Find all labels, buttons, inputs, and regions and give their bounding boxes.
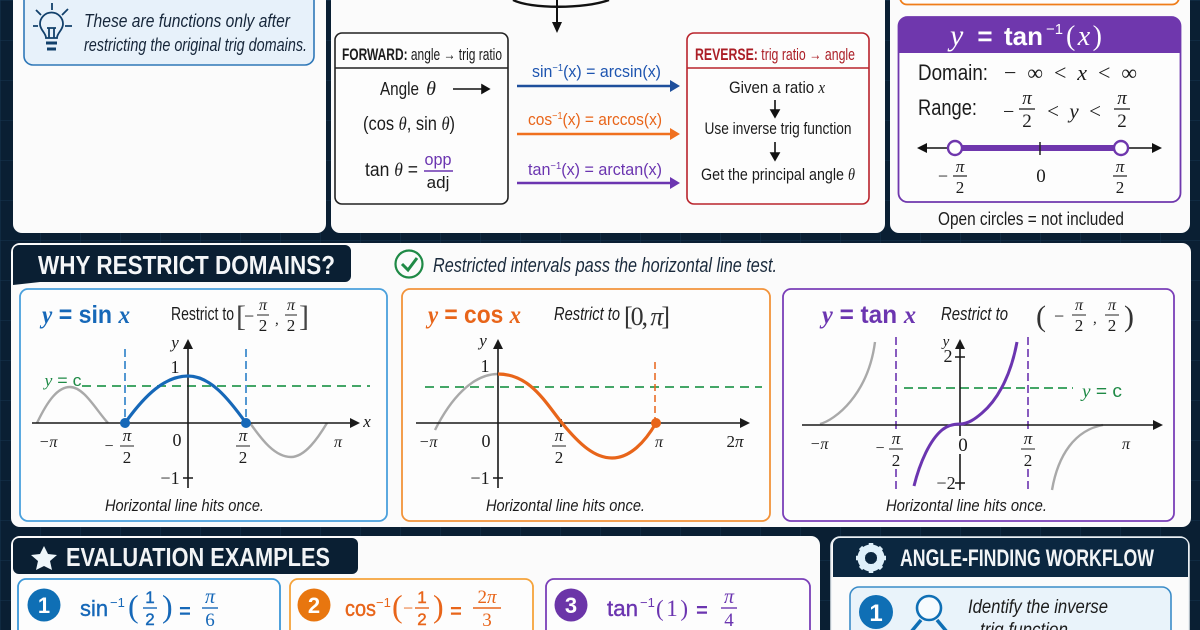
panel: evaluation examples [11,536,820,630]
title: y = tan x: y = tan x [819,301,916,329]
chart: sine graph: π [239,426,248,445]
formula: y = tan inverse x: tan [1004,21,1043,51]
range inequality: π [1022,88,1032,109]
card: tangent [783,289,1174,521]
panel: forward and reverse mapping [331,0,885,233]
range inequality: y [1067,99,1079,123]
reverse box: Get the principal angle θ [701,165,855,184]
example 2: inverse cosine: − [403,598,413,618]
formula: y = tan inverse x: −1 [1046,21,1063,38]
reverse box [687,33,869,204]
example 2: inverse cosine: 2 [417,610,427,629]
chart: tangent graph: π [892,429,901,448]
restriction: sine interval: Restrict to [171,304,234,324]
restriction: sine interval: , [275,312,279,328]
formula: y = tan inverse x [947,19,1102,52]
chart: tangent graph: −π [810,436,829,453]
restriction: sine interval: 2 [259,316,267,335]
arrow: step two to three [771,142,779,160]
icon: gear [856,543,886,573]
purple card: Domain: [918,60,988,85]
example 3: inverse tangent [546,579,810,630]
purple card: − ∞ < x < ∞ [1004,60,1137,85]
arrow: arctan mapping: (x) = arctan(x) [561,160,662,179]
chart: cosine graph: π [655,434,664,451]
chart: tangent graph: π [1122,436,1131,453]
workflow step 1 [850,587,1171,630]
forward box: FORWARD: angle → trig ratio [342,45,502,64]
restriction: sine interval [171,297,309,335]
example 3: inverse tangent: (1) [656,596,688,621]
chart: cosine graph: 2 [555,448,563,467]
restriction: tangent interval: 2 [1108,316,1116,335]
fraction: opp over adj: opp [424,150,452,169]
heading: angle-finding workflow [833,538,1188,577]
example 2: inverse cosine: cos [345,596,376,621]
callout: domain restriction note [24,0,314,65]
example 2: inverse cosine: 1 [417,588,427,607]
chart: sine graph: π [334,434,343,451]
callout text: restricting the original trig domains. [84,35,307,55]
chart: tangent graph: 2 [944,346,952,366]
workflow step 1: Identify the inverse [968,597,1108,618]
arrow: arctan mapping: −1 [550,161,562,172]
restriction: tangent interval [941,297,1134,335]
forward box: θ [426,78,436,100]
restriction: cosine interval: Restrict to [554,304,620,324]
heading: why restrict domains [13,245,351,285]
formula: y = tan inverse x: (x) [1066,21,1102,52]
forward box [335,33,508,204]
arrow: arccos mapping: cos [528,110,554,129]
number line: π [956,157,965,176]
card: sine [20,289,387,521]
icon: magnifying glass [911,596,947,630]
example 2: inverse cosine: 2 [308,593,320,618]
chart: tangent graph: π [1024,429,1033,448]
caption: Horizontal line hits once. [486,496,645,515]
example 1: inverse sine: sin [80,596,108,621]
panel: angle-finding workflow [831,537,1189,630]
chart: sine graph: 2 [239,448,247,467]
restriction: tangent interval: ( [1036,300,1046,333]
chart: tangent graph: −2 [936,473,956,493]
heading: evaluation examples: EVALUATION EXAMPLES [66,542,330,572]
example 3: inverse tangent: 3 [565,593,577,618]
example 1: inverse sine: ( [128,588,139,624]
arrow: arctan mapping: tan [528,160,552,179]
formula: y = tan inverse x: = [977,21,993,51]
number line: 2 [1116,178,1124,197]
restriction: sine interval: π [259,297,268,314]
range inequality: 2 [1117,111,1127,132]
callout text [84,11,307,55]
panel: definition note [13,0,326,233]
restriction: tangent interval: π [1108,297,1117,314]
forward box: (cos θ, sin θ) [363,114,455,135]
panel: inverse tangent card [890,0,1190,233]
example 1: inverse sine: 1 [38,593,50,618]
restriction: tangent interval: π [1075,297,1084,314]
arrow: arcsin mapping: sin [532,62,554,81]
chart: tangent graph [802,334,1163,493]
chart: tangent graph: y = c [1080,381,1122,401]
range inequality: < [1047,99,1059,123]
callout text: These are functions only after [84,11,291,31]
range inequality: π [1117,88,1127,109]
previous orange card edge [900,0,1179,4]
arrow: arcsin mapping [517,62,680,92]
chart: sine graph: − [104,438,114,455]
restriction: tangent interval: Restrict to [941,304,1008,324]
restriction: tangent interval: ) [1124,300,1134,333]
chart: sine graph: π [123,426,132,445]
title: y = cos x: y = cos x [425,301,521,329]
example 2: inverse cosine [290,579,533,630]
example 1: inverse sine: 2 [145,610,155,629]
chart: sine graph: 2 [123,448,131,467]
chart: sine graph: x [362,412,371,431]
example 1: inverse sine [18,579,280,630]
example 3: inverse tangent: −1 [640,595,655,610]
example 3: inverse tangent: tan [607,596,638,621]
forward box: Angle [380,79,419,99]
example 3: inverse tangent: = [696,600,708,622]
reverse box: Use inverse trig function [704,119,852,138]
restriction: cosine interval: [0, π] [624,302,670,331]
fraction: opp over adj [424,150,453,192]
formula: y = tan inverse x: y [947,19,964,52]
example 1: inverse sine: 1 [145,588,155,607]
chart: tangent graph: 2 [1024,451,1032,470]
card: cosine [402,289,770,521]
chart: sine graph: y = c [42,371,82,390]
example 1: inverse sine: −1 [110,595,125,610]
chart: cosine graph: 0 [482,431,490,451]
chart: cosine graph: −π [419,434,438,451]
reverse box: REVERSE: trig ratio → angle [695,45,855,64]
forward box: tan θ = [365,160,418,181]
title: y = sin x: y = sin x [39,301,130,329]
arrow: arctan mapping [517,160,680,189]
example 2: inverse cosine: ( [392,588,403,624]
fraction: opp over adj: adj [427,173,449,192]
arrow: arccos mapping: (x) = arccos(x) [563,110,662,129]
purple card: Range: [918,95,977,120]
example 1: inverse sine: = [179,601,191,623]
number line: π [1116,157,1125,176]
restriction: sine interval: [ [236,300,246,333]
arrow: arcsin mapping: −1 [552,63,563,74]
number line: 2 [956,178,964,197]
icon: star [31,546,57,570]
chart: tangent graph: − [875,440,885,457]
caption: Horizontal line hits once. [886,496,1047,515]
restriction: sine interval: 2 [287,316,295,335]
chart: sine graph: 0 [172,430,182,450]
restriction: sine interval: − [244,306,254,326]
arrow: angle to ratio [453,85,489,93]
example 2: inverse cosine: ) [433,588,444,624]
number line: − [938,166,948,186]
arrow: step one to two [771,100,779,117]
unit circle fragment with down arrow [513,0,609,33]
restriction: sine interval: π [287,297,296,314]
example 2: inverse cosine: = [450,601,462,623]
example 3: inverse tangent: π [724,586,735,608]
chart: cosine graph: π [555,426,564,445]
chart: cosine graph: 1 [480,356,490,376]
restriction: tangent interval: , [1093,311,1097,327]
chart: sine graph [32,333,371,488]
chart: tangent graph: y [941,334,950,350]
example 2: inverse cosine: 2π [477,587,497,608]
arrow: arccos mapping [517,110,680,140]
restriction: cosine interval [554,302,670,331]
chart: sine graph: y [169,333,179,352]
heading: evaluation examples [13,538,358,574]
range inequality: < [1089,99,1101,123]
restriction: tangent interval: − [1054,306,1064,326]
example 1: inverse sine: π [205,586,216,608]
reverse box: Given a ratio x [729,78,825,97]
chart: tangent graph: 0 [958,435,968,456]
icon: light bulb [33,3,72,49]
number line [917,141,1162,197]
subheading: horizontal line test: Restricted intervals pass the horizontal line test. [433,255,777,277]
caption: Horizontal line hits once. [105,496,264,515]
restriction: tangent interval: 2 [1075,316,1083,335]
panel: why restrict domains [11,243,1191,527]
chart: cosine graph: y [477,331,487,350]
example 1: inverse sine: ) [162,588,173,624]
chart: sine graph: 1 [170,357,180,377]
example 2: inverse cosine: −1 [376,595,391,610]
chart: sine graph: −π [39,434,58,451]
chart: cosine graph: 2π [726,432,744,451]
chart: cosine graph: −1 [470,468,490,488]
heading: why restrict domains: WHY RESTRICT DOMAINS? [38,250,335,280]
note: open circles: Open circles = not included [938,209,1124,229]
range inequality: − [1003,101,1014,123]
purple card [898,17,1181,202]
chart: cosine graph [416,331,762,488]
workflow step 1: 1 [869,600,883,627]
range inequality: 2 [1022,111,1032,132]
arrow: arcsin mapping: (x) = arcsin(x) [563,62,661,81]
restriction: sine interval: ] [299,300,309,333]
number line: 0 [1036,166,1046,187]
arrow: arccos mapping: −1 [552,111,563,122]
range inequality [1003,88,1130,132]
chart: sine graph: −1 [160,468,180,488]
icon: green check [396,250,422,278]
chart: tangent graph: 2 [892,451,900,470]
